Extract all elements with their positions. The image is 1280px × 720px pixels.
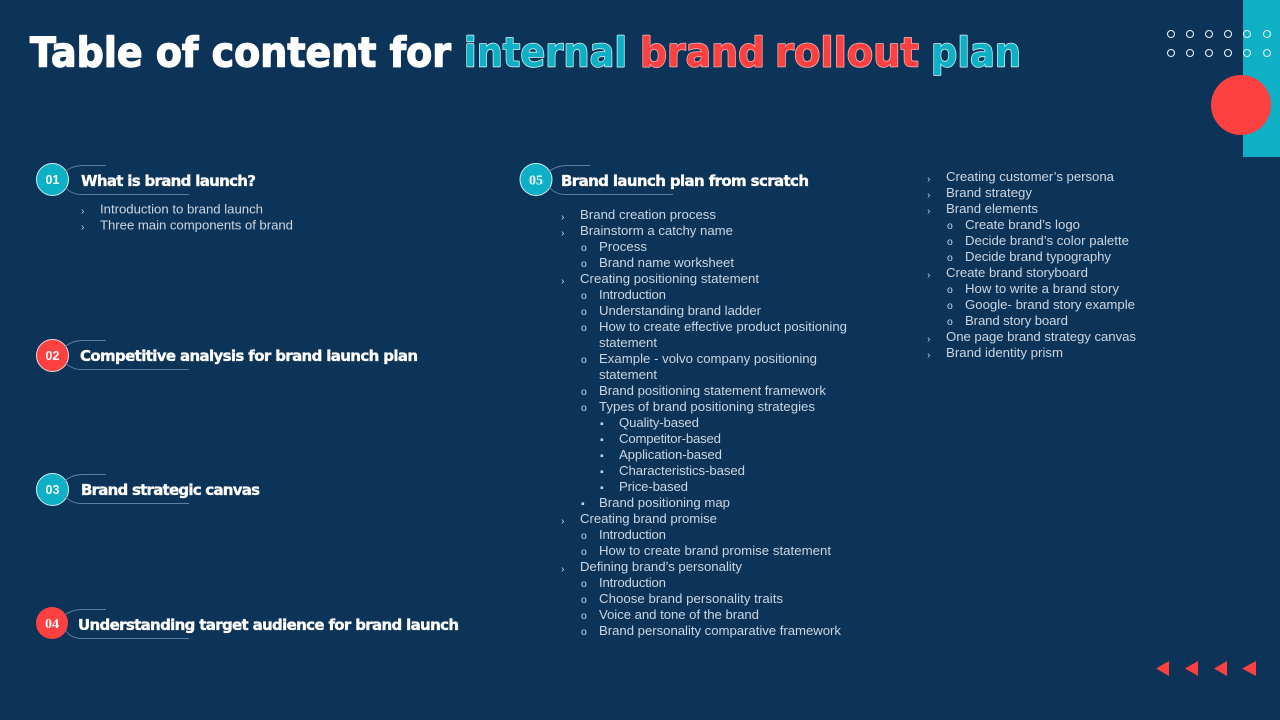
- list 05: o: [581, 306, 587, 318]
- section 01: [36, 164, 293, 233]
- list 05: o: [581, 610, 587, 622]
- list 01: [81, 202, 293, 233]
- connector 02: [65, 340, 189, 370]
- list 05: [561, 207, 847, 638]
- decoration: red triangles: [1156, 661, 1256, 676]
- list 05: Brainstorm a catchy name: [580, 223, 733, 238]
- title: Table of content for: [30, 28, 452, 76]
- list 05: o: [581, 594, 587, 606]
- list: section 05 continued: ›: [927, 173, 931, 185]
- list: section 05 continued: ›: [927, 269, 931, 281]
- list 05: Price-based: [619, 479, 688, 494]
- list 05: statement: [599, 367, 657, 382]
- list: section 05 continued: Create brand storyboard: [946, 265, 1088, 280]
- list: section 05 continued: o: [947, 284, 953, 296]
- badge 02: 02: [46, 349, 59, 363]
- list 05: o: [581, 626, 587, 638]
- list 05: ▪: [600, 466, 604, 478]
- badge 03: [36, 474, 68, 506]
- list 05: o: [581, 290, 587, 302]
- list 05: o: [581, 242, 587, 254]
- list 05: How to create brand promise statement: [599, 543, 831, 558]
- list 01: ›: [81, 221, 85, 233]
- connector 01: [65, 166, 189, 194]
- list: section 05 continued: Brand strategy: [946, 185, 1032, 200]
- list: section 05 continued: Google- brand story example: [965, 297, 1135, 312]
- badge 04: [36, 607, 68, 639]
- list 05: Defining brand’s personality: [580, 559, 742, 574]
- list 05: Quality-based: [619, 415, 699, 430]
- list 05: Introduction: [599, 575, 666, 590]
- badge 05: [520, 164, 552, 196]
- list 05: ›: [561, 275, 565, 287]
- list 05: ▪: [600, 482, 604, 494]
- badge 01: [36, 164, 68, 196]
- list 05: Creating positioning statement: [580, 271, 759, 286]
- list: section 05 continued: Create brand’s logo: [965, 217, 1080, 232]
- list 05: o: [581, 322, 587, 334]
- list: section 05 continued: ›: [927, 333, 931, 345]
- list 05: Brand positioning statement framework: [599, 383, 826, 398]
- badge 01: 01: [46, 173, 59, 187]
- list 05: Introduction: [599, 287, 666, 302]
- list 05: ›: [561, 515, 565, 527]
- title: [30, 28, 1021, 76]
- list 05: statement: [599, 335, 657, 350]
- list 05: How to create effective product positioning: [599, 319, 847, 334]
- connector 04: [65, 610, 189, 638]
- list 05: Understanding brand ladder: [599, 303, 762, 318]
- list: section 05 continued: o: [947, 252, 953, 264]
- list 05: o: [581, 402, 587, 414]
- list: section 05 continued: Decide brand’s color palette: [965, 233, 1129, 248]
- list: section 05 continued: Brand identity prism: [946, 345, 1063, 360]
- list 05: Voice and tone of the brand: [599, 607, 759, 622]
- list 05: o: [581, 258, 587, 270]
- list 01: Introduction to brand launch: [100, 202, 263, 216]
- list 01: Three main components of brand: [100, 218, 293, 232]
- list: section 05 continued: o: [947, 236, 953, 248]
- list: section 05 continued: Brand elements: [946, 201, 1038, 216]
- list 05: Creating brand promise: [580, 511, 717, 526]
- list: section 05 continued: Brand story board: [965, 313, 1068, 328]
- list 05: ›: [561, 227, 565, 239]
- list: section 05 continued: ›: [927, 205, 931, 217]
- list 05: o: [581, 578, 587, 590]
- heading 01: What is brand launch?: [81, 172, 256, 190]
- list 05: Application-based: [619, 447, 722, 462]
- heading 04: Understanding target audience for brand launch: [78, 616, 459, 634]
- list 05: Characteristics-based: [619, 463, 745, 478]
- list 05: ▪: [581, 498, 585, 510]
- list 05: o: [581, 386, 587, 398]
- list 05: Example - volvo company positioning: [599, 351, 817, 366]
- decoration: dot grid: [1168, 30, 1270, 56]
- section 04: [36, 607, 459, 639]
- list 05: ›: [561, 563, 565, 575]
- title: internal: [464, 28, 627, 76]
- decoration: teal corner bar: [1243, 0, 1280, 157]
- decoration: red circle: [1211, 75, 1271, 135]
- badge number 04: 04: [45, 617, 59, 632]
- list: section 05 continued: One page brand strategy canvas: [946, 329, 1136, 344]
- list: section 05 continued: How to write a brand story: [965, 281, 1119, 296]
- section 02: [36, 340, 418, 372]
- list: section 05 continued: Creating customer’s persona: [946, 169, 1115, 184]
- list 05: ›: [561, 211, 565, 223]
- connector 05: [549, 166, 673, 194]
- list 05: Brand personality comparative framework: [599, 623, 841, 638]
- list 05: ▪: [600, 434, 604, 446]
- list 01: ›: [81, 205, 85, 217]
- heading 03: Brand strategic canvas: [81, 481, 260, 499]
- list 05: Process: [599, 239, 647, 254]
- list 05: Brand name worksheet: [599, 255, 734, 270]
- list 05: o: [581, 546, 587, 558]
- list: section 05 continued: ›: [927, 349, 931, 361]
- list 05: Brand creation process: [580, 207, 716, 222]
- list 05: Types of brand positioning strategies: [599, 399, 815, 414]
- heading 05: Brand launch plan from scratch: [561, 172, 809, 190]
- connector 03: [65, 474, 189, 504]
- title: brand: [640, 28, 765, 76]
- list: section 05 continued: ›: [927, 189, 931, 201]
- list 05: Brand positioning map: [599, 495, 730, 510]
- badge 05: 05: [529, 174, 543, 188]
- list: section 05 continued: o: [947, 316, 953, 328]
- list 05: Competitor-based: [619, 431, 721, 446]
- list 05: o: [581, 530, 587, 542]
- list: section 05 continued: o: [947, 300, 953, 312]
- list: section 05 continued: [927, 169, 1136, 361]
- badge 02: [36, 340, 68, 372]
- section 03: [36, 474, 260, 506]
- section 05: [520, 164, 847, 638]
- list 05: o: [581, 354, 587, 366]
- title: plan: [931, 28, 1021, 76]
- list 05: Introduction: [599, 527, 666, 542]
- badge 03: 03: [46, 483, 59, 497]
- list: section 05 continued: o: [947, 220, 953, 232]
- title: rollout: [775, 28, 919, 76]
- heading 02: Competitive analysis for brand launch plan: [80, 347, 418, 365]
- list 05: ▪: [600, 418, 604, 430]
- list: section 05 continued: Decide brand typography: [965, 249, 1111, 264]
- list 05: ▪: [600, 450, 604, 462]
- list 05: Choose brand personality traits: [599, 591, 783, 606]
